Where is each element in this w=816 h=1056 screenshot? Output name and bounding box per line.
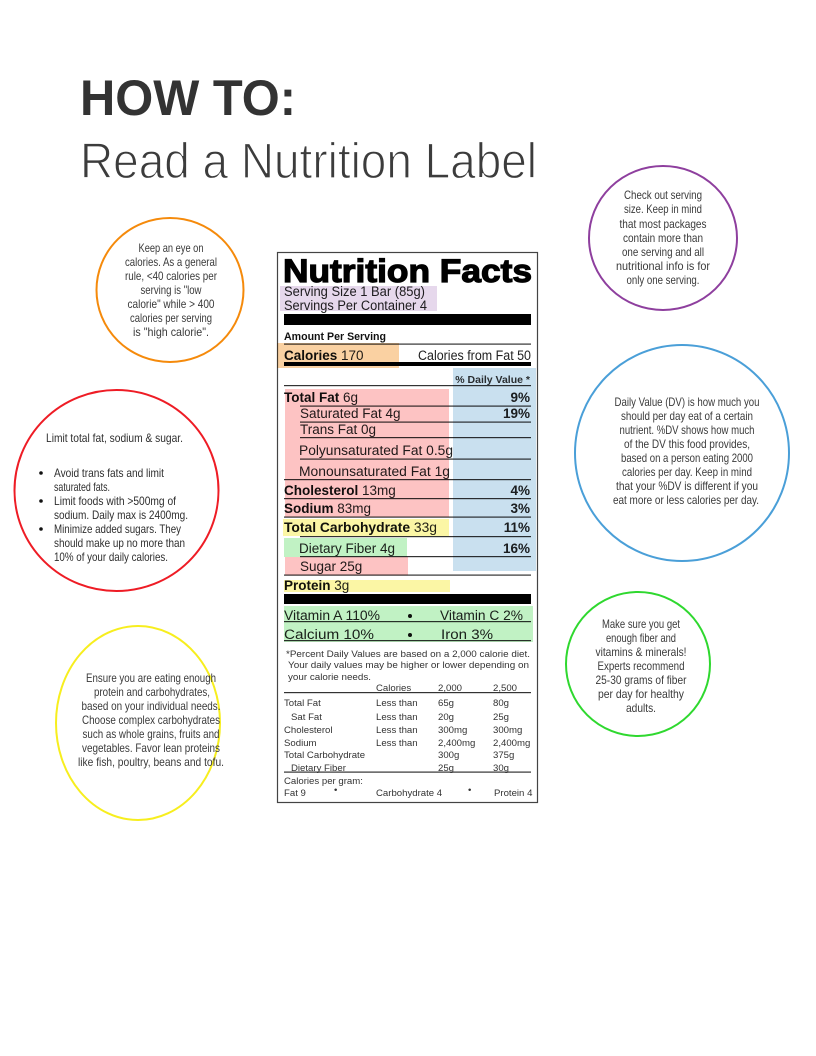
callout: protein and carbohydrates: protein and carbohydrates,: [94, 685, 210, 699]
callout: serving size: that most packages: [620, 217, 706, 231]
daily values table: 30g: [493, 763, 509, 774]
callout: calories: is "high calorie".: [133, 325, 209, 339]
callout: fiber and minerals: enough fiber and: [606, 631, 676, 645]
footnote: Your daily values may be higher or lower depending on: [288, 660, 529, 671]
daily values table: 2,000: [438, 683, 462, 694]
callout: fiber and minerals: [566, 592, 710, 736]
callout: protein and carbohydrates: such as whole grains, fruits and: [82, 727, 220, 741]
vitamins and minerals: Iron 3%: [441, 627, 493, 642]
footnote: *Percent Daily Values are based on a 2,000 calorie diet.: [286, 649, 530, 660]
daily values table: Calories: [376, 683, 411, 694]
callout: serving size: Check out serving: [624, 188, 702, 202]
daily values table: 300g: [438, 750, 459, 761]
nutrient rows: Sugar 25g: [300, 559, 362, 574]
daily values table: 80g: [493, 698, 509, 709]
daily values table: 25g: [438, 763, 454, 774]
daily values table: 300mg: [438, 725, 467, 736]
daily values table: 65g: [438, 698, 454, 709]
callout: limit fat, sodium and sugar: Limit foods with >500mg of: [54, 494, 177, 508]
callout: calories: calories. As a general: [125, 255, 217, 269]
callout: serving size: nutritional info is for: [616, 259, 710, 273]
calories row: [284, 348, 531, 363]
callout: calories: calorie" while > 400: [128, 297, 215, 311]
callout: serving size: one serving and all: [622, 245, 704, 259]
nutrient rows: Trans Fat 0g: [300, 422, 376, 437]
title: [80, 70, 537, 189]
callout: daily value: based on a person eating 2000: [621, 451, 753, 465]
daily value percentages: 9%: [510, 390, 530, 405]
callout: daily value: Daily Value (DV) is how much you: [614, 395, 760, 409]
callout: fiber and minerals: Experts recommend: [598, 659, 684, 673]
daily values table: Cholesterol: [284, 725, 333, 736]
nutrient rows: Total Carbohydrate 33g: [284, 520, 437, 535]
callout: protein and carbohydrates: based on your individual needs.: [82, 699, 220, 713]
daily values table: Less than: [376, 725, 418, 736]
vitamins and minerals: Vitamin C 2%: [440, 608, 523, 623]
callout: limit fat, sodium and sugar: should make up no more than: [54, 536, 185, 550]
callout: fiber and minerals: per day for healthy: [598, 687, 684, 701]
daily value percentages: 19%: [503, 406, 530, 421]
nutrient rows: Saturated Fat 4g: [300, 406, 401, 421]
callout: fiber and minerals: vitamins & minerals!: [596, 645, 686, 659]
daily value percentages: 11%: [504, 520, 530, 535]
highlight: vitamins and minerals: [284, 606, 533, 642]
highlight: fiber: [284, 538, 407, 557]
nutrition facts label: [277, 252, 538, 802]
vitamins and minerals: Vitamin A 110%: [284, 608, 380, 623]
daily values table: Dietary Fiber: [291, 763, 347, 774]
serving information: [284, 284, 427, 313]
highlight: sugar: [285, 557, 408, 576]
daily values table: 25g: [493, 712, 509, 723]
callout: fiber and minerals: Make sure you get: [602, 617, 681, 631]
calories row: Calories from Fat 50: [418, 348, 531, 363]
callout: limit fat, sodium and sugar: saturated fats.: [54, 480, 110, 494]
callout: serving size: size. Keep in mind: [624, 202, 702, 216]
daily values table: Sat Fat: [291, 712, 322, 723]
highlight: daily value: [453, 368, 536, 571]
callout: protein and carbohydrates: Ensure you are eating enough: [86, 671, 216, 685]
nutrient rows: Sodium 83mg: [284, 501, 371, 516]
callout: limit fat, sodium and sugar: Avoid trans fats and limit: [54, 466, 165, 480]
callout: daily value: of the DV this food provides,: [624, 437, 750, 451]
daily values table: Less than: [376, 698, 418, 709]
footnote: your calorie needs.: [288, 672, 371, 683]
callout: protein and carbohydrates: like fish, poultry, beans and tofu.: [78, 755, 224, 769]
nutrient rows: Polyunsaturated Fat 0.5g: [299, 443, 453, 458]
daily values table: 2,500: [493, 683, 517, 694]
calories per gram: •: [334, 785, 337, 796]
highlight: protein: [284, 580, 450, 592]
callout: daily value: eat more or less calories per day.: [613, 493, 759, 507]
daily values table: [284, 683, 530, 774]
daily value heading: % Daily Value *: [455, 374, 531, 386]
callout: fiber and minerals: adults.: [626, 701, 656, 715]
footnote: [286, 649, 530, 683]
callout: calories: Keep an eye on: [138, 241, 204, 255]
callout: limit fat, sodium and sugar: 10% of your daily calories.: [54, 550, 168, 564]
callout: protein and carbohydrates: Choose complex carbohydrates: [82, 713, 220, 727]
daily values table: 2,400mg: [493, 738, 530, 749]
nutrient rows: Protein 3g: [284, 578, 349, 593]
highlight: serving size: [280, 286, 437, 311]
calories per gram: •: [468, 785, 471, 796]
daily values table: 20g: [438, 712, 454, 723]
daily values table: Sodium: [284, 738, 317, 749]
thick rules and row lines: [284, 314, 531, 773]
callout: protein and carbohydrates: [56, 626, 224, 820]
callout: calories: rule, <40 calories per: [125, 269, 217, 283]
calories per gram: Fat 9: [284, 788, 306, 799]
daily values table: Total Carbohydrate: [284, 750, 365, 761]
heading: read a nutrition label: Read a Nutrition Label: [80, 133, 537, 189]
daily values table: Less than: [376, 712, 418, 723]
callout: limit fat, sodium and sugar: sodium. Daily max is 2400mg.: [54, 508, 188, 522]
heading: how to: HOW TO:: [80, 70, 296, 126]
callout: limit fat, sodium and sugar: [14, 390, 218, 591]
callout: serving size: [589, 166, 737, 310]
bullet dots: [39, 471, 43, 531]
daily value percentages: 16%: [503, 541, 530, 556]
callout: serving size: contain more than: [623, 231, 703, 245]
daily value percentages: 3%: [510, 501, 530, 516]
daily value percentages: [503, 390, 530, 556]
calories per gram: Calories per gram:: [284, 776, 363, 787]
daily values table: Less than: [376, 738, 418, 749]
daily values table: Total Fat: [284, 698, 321, 709]
serving information: Serving Size 1 Bar (85g): [284, 284, 425, 299]
highlight: carbohydrate: [283, 519, 449, 536]
nutrient rows: Total Fat 6g: [284, 390, 358, 405]
callout: serving size: only one serving.: [626, 273, 700, 287]
nutrient rows: Cholesterol 13mg: [284, 483, 396, 498]
callout: protein and carbohydrates: vegetables. Favor lean proteins: [82, 741, 220, 755]
callout: calories: [96, 218, 244, 362]
daily value percentages: 4%: [510, 483, 530, 498]
callout: daily value: nutrient. %DV shows how much: [620, 423, 754, 437]
nutrient rows: Dietary Fiber 4g: [299, 541, 395, 556]
callout: limit fat, sodium and sugar: Limit total fat, sodium & sugar.: [46, 431, 183, 445]
daily values table: 2,400mg: [438, 738, 475, 749]
callout: daily value: that your %DV is different if you: [616, 479, 758, 493]
callout: limit fat, sodium and sugar: Minimize added sugars. They: [54, 522, 181, 536]
callout: calories: serving is "low: [140, 283, 202, 297]
daily values table: 375g: [493, 750, 514, 761]
callout: daily value: should per day eat of a certain: [621, 409, 753, 423]
callout: fiber and minerals: 25-30 grams of fiber: [596, 673, 686, 687]
daily values table: 300mg: [493, 725, 522, 736]
vitamins and minerals: [284, 608, 523, 642]
label heading: Nutrition Facts: [283, 253, 532, 289]
highlight: calories: [277, 343, 399, 368]
calories per gram: Carbohydrate 4: [376, 788, 443, 799]
label border: [278, 252, 538, 802]
calories per gram: Protein 4: [494, 788, 533, 799]
highlight: fats, cholesterol and sodium: [285, 389, 449, 517]
nutrient rows: [284, 390, 453, 593]
serving information: Servings Per Container 4: [284, 298, 427, 313]
calories per gram: [284, 776, 533, 799]
amount per serving: Amount Per Serving: [284, 331, 386, 343]
vitamins and minerals: Calcium 10%: [284, 627, 374, 642]
callout: calories: calories per serving: [130, 311, 212, 325]
nutrient rows: Monounsaturated Fat 1g: [299, 464, 450, 479]
calories row: Calories 170: [284, 348, 364, 363]
callout: daily value: [575, 345, 789, 561]
callout: daily value: calories per day. Keep in mind: [622, 465, 752, 479]
